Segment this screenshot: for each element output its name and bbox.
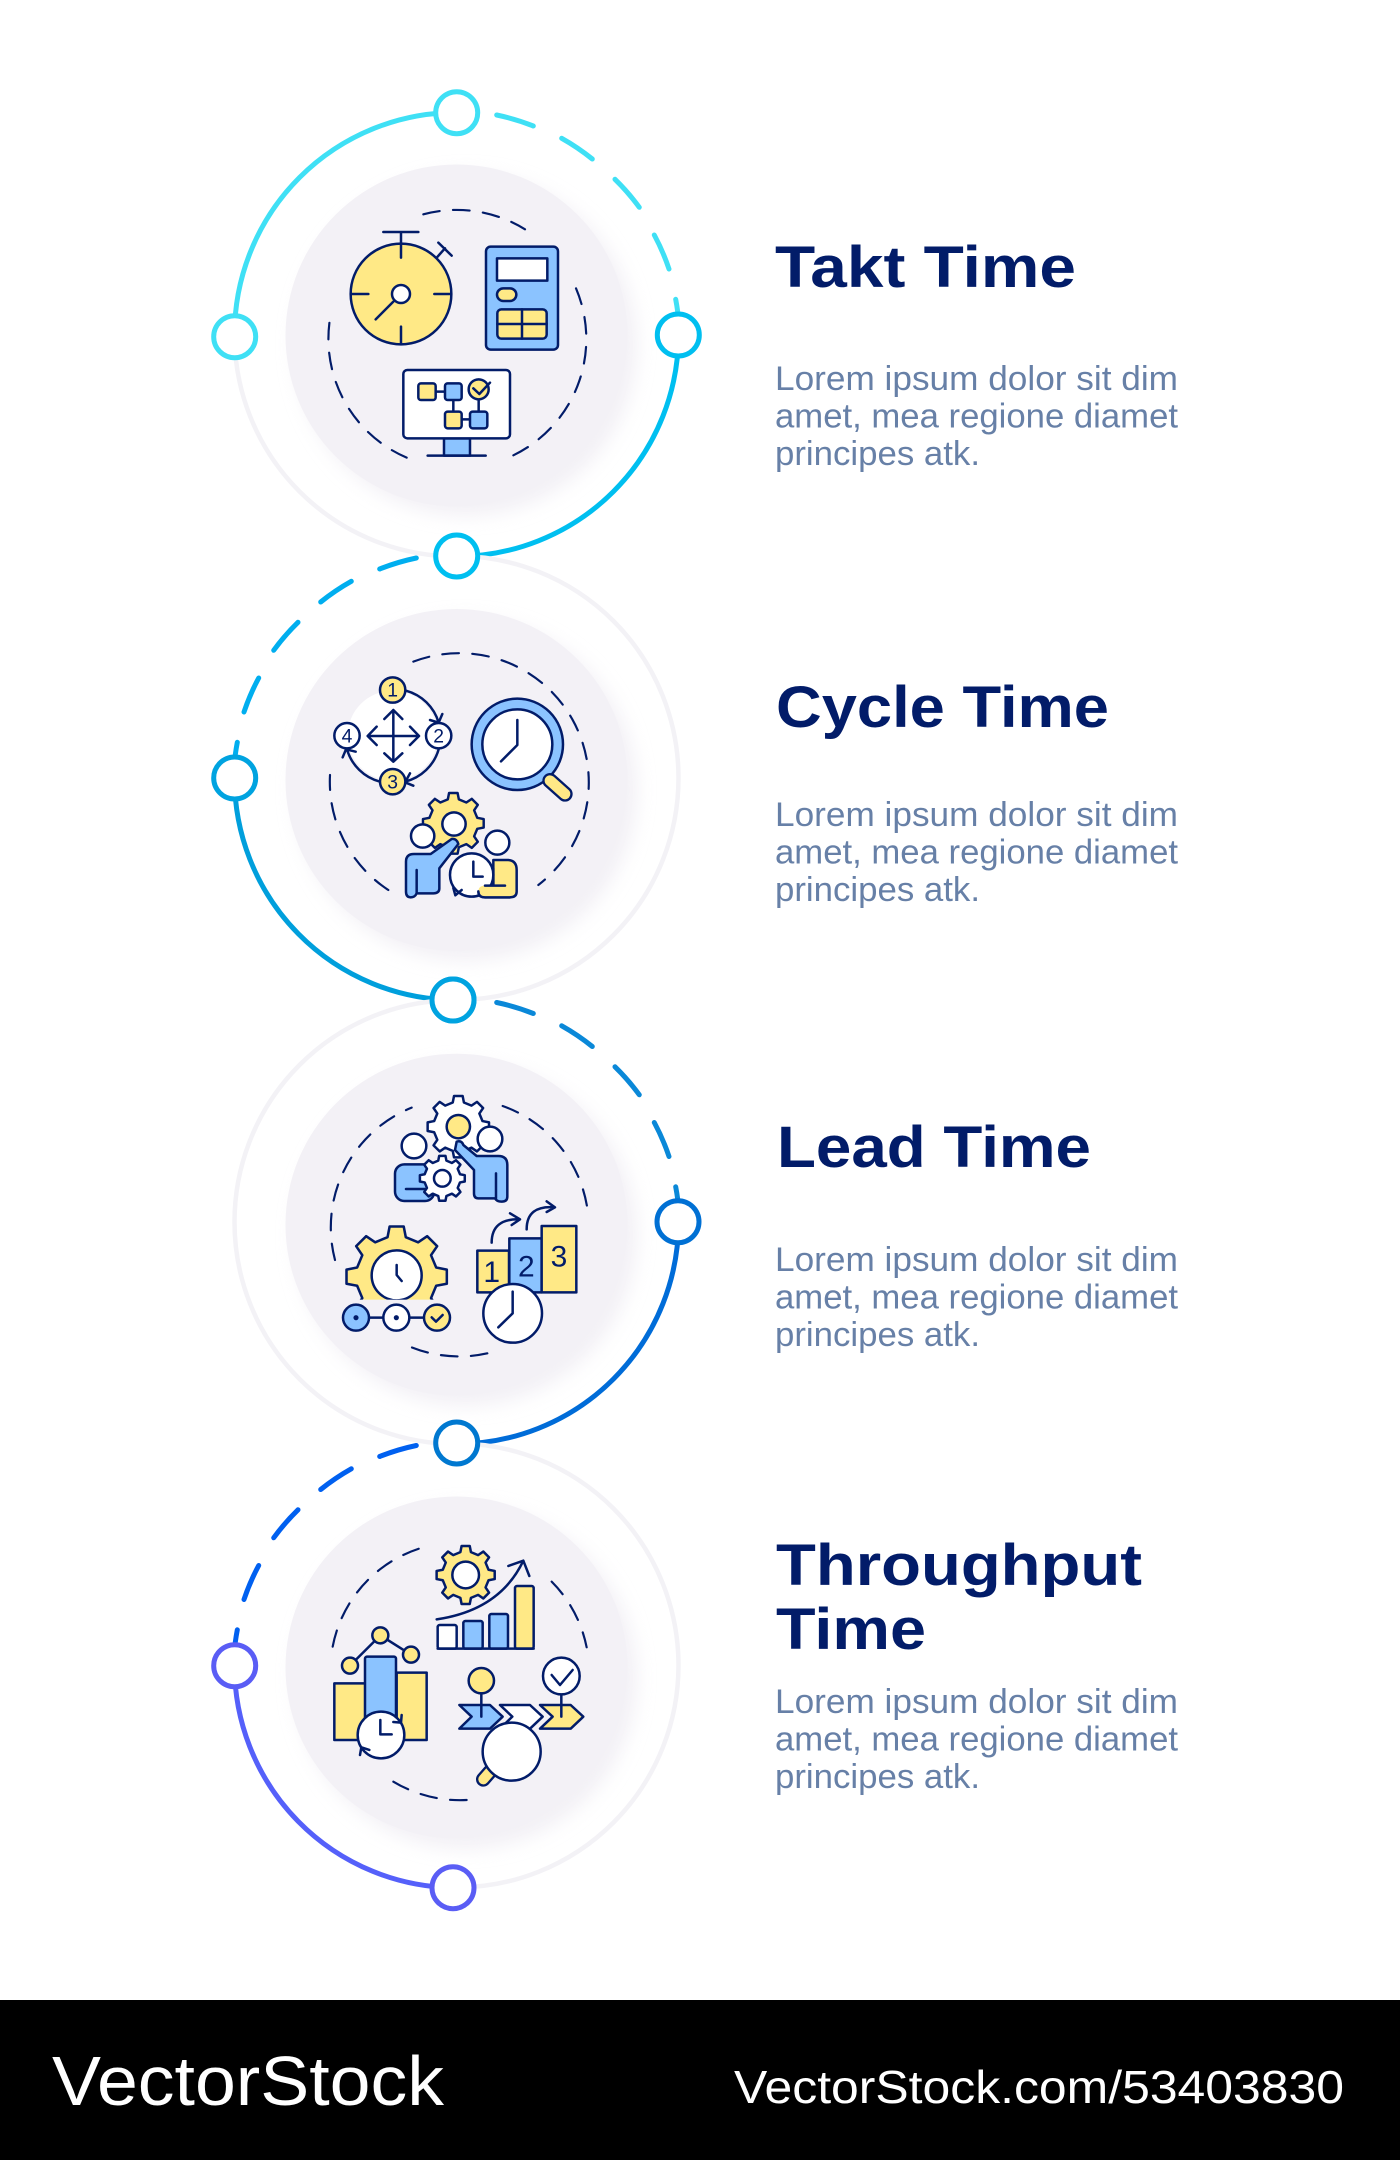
text block: lead time: amet, mea regione diamet [775,1278,1179,1316]
footer url text: VectorStock.com/53403830 [734,2061,1344,2113]
text block: lead time [775,1241,1179,1354]
icon: cycle loop, magnifier clock, team with gear [330,653,589,897]
heading: takt time: Takt Time [775,235,1076,300]
text block: throughput time: amet, mea regione diamet [775,1720,1179,1758]
text block: takt time [775,360,1179,473]
footer logo text: VectorStock [52,2042,445,2120]
icon: cycle loop, magnifier clock, team with gear: 4 [342,726,353,747]
text block: throughput time: principes atk. [775,1758,980,1796]
ring: lead time [235,979,699,1444]
icon: team with gears, clock gear, podium: 1 [483,1256,500,1289]
text block: takt time: amet, mea regione diamet [775,398,1179,436]
text block: cycle time [775,796,1179,909]
footer band [0,2000,1400,2160]
text block: cycle time: amet, mea regione diamet [775,834,1179,872]
backdrop disc: lead time [286,1054,637,1406]
icon: team with gears, clock gear, podium: 3 [551,1241,567,1274]
text block: throughput time: Lorem ipsum dolor sit dim [775,1683,1178,1721]
heading: throughput time: Time [776,1597,926,1662]
text block: cycle time: Lorem ipsum dolor sit dim [775,796,1178,834]
panel: lead time [235,979,699,1444]
icon: stopwatch, calculator, flowchart monitor [328,210,586,458]
text block: lead time: Lorem ipsum dolor sit dim [775,1241,1178,1279]
panel: throughput time [214,1422,678,1909]
panel: takt time [214,92,699,556]
text block: throughput time [775,1683,1179,1796]
text block: lead time: principes atk. [775,1316,980,1354]
backdrop disc: takt time [286,164,637,516]
ring: cycle time [214,535,678,1021]
icon: cycle loop, magnifier clock, team with gear: 3 [387,772,398,793]
icon: cycle loop, magnifier clock, team with gear: 1 [387,681,398,702]
icon: team with gears, clock gear, podium [331,1096,588,1356]
text block: takt time: Lorem ipsum dolor sit dim [775,360,1178,398]
heading: throughput time [776,1533,1142,1662]
backdrop disc: cycle time [286,609,637,961]
ring: throughput time [214,1422,678,1909]
panel: cycle time [214,535,678,1021]
icon: growth bars, clock chart, process chevrons [333,1546,587,1800]
heading: cycle time: Cycle Time [776,675,1109,740]
text block: takt time: principes atk. [775,435,980,473]
backdrop disc: throughput time [286,1496,637,1849]
heading: throughput time: Throughput [776,1533,1142,1598]
icon: cycle loop, magnifier clock, team with gear: 2 [433,726,444,747]
heading: lead time: Lead Time [777,1115,1091,1180]
ring: takt time [214,92,699,556]
icon: team with gears, clock gear, podium: 2 [518,1250,535,1283]
text block: cycle time: principes atk. [775,871,980,909]
